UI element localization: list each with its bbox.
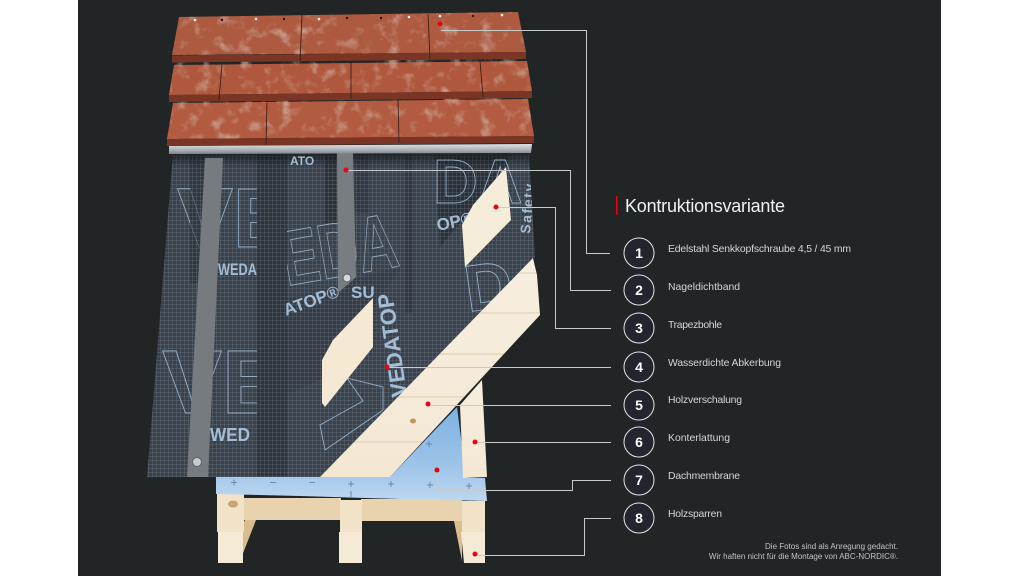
trapezoid plank patch lower [322, 298, 373, 407]
blue roof membrane (Dachmembrane) [216, 407, 487, 501]
item 7: Dachmembrane [668, 471, 740, 482]
tile faces [172, 12, 526, 55]
waterproof underlay (Wasserdichte Abkerbung) [140, 148, 540, 480]
item 8 [624, 503, 722, 533]
large outlined lettering: EDA [275, 196, 404, 303]
item 2 [624, 275, 740, 305]
item 6 [624, 427, 730, 457]
printed VEDATOP lettering: ATOP® [281, 282, 342, 320]
printed VEDATOP lettering: WEDA [218, 260, 257, 279]
printed VEDATOP lettering: SU [351, 283, 375, 302]
footnote: Die Fotos sind als Anregung gedacht. [765, 542, 898, 551]
timber rafters (Holzsparren) [217, 494, 485, 563]
item 8: Holzsparren [668, 509, 722, 520]
waterproof underlay (Wasserdichte Abkerbung): DA [433, 148, 523, 217]
item 7: 7 [635, 472, 643, 488]
item 4: Wasserdichte Abkerbung [668, 358, 781, 369]
leader lines [346, 30, 611, 556]
item 3 [624, 313, 722, 343]
red marker dots [344, 22, 498, 556]
item 1: Edelstahl Senkkopfschraube 4,5 / 45 mm [668, 244, 851, 255]
printed VEDATOP lettering: Safety [517, 183, 537, 234]
item 5: 5 [635, 397, 643, 413]
item 6: Konterlattung [668, 433, 730, 444]
printed VEDATOP lettering: WED [210, 425, 250, 445]
footnote: Wir haften nicht für die Montage von ABC-NORDIC®. [709, 552, 898, 561]
large outlined lettering: VE [177, 171, 289, 265]
item 2: Nageldichtband [668, 282, 740, 293]
item 5: Holzverschalung [668, 395, 742, 406]
roof build-up illustration [140, 8, 545, 563]
item 3: 3 [635, 320, 643, 336]
metal eaves flashing [169, 144, 532, 154]
printed VEDATOP lettering [210, 154, 537, 445]
item 4: 4 [635, 359, 643, 375]
printed VEDATOP lettering: OP® [435, 209, 476, 235]
trapezoid plank patch upper (Trapezbohle) [462, 167, 511, 267]
tile holes [194, 14, 503, 21]
heading: Kontruktionsvariante [625, 196, 785, 216]
item 4 [624, 352, 781, 382]
item 1 [624, 238, 851, 268]
numbered legend [624, 238, 851, 533]
item 2: 2 [635, 282, 643, 298]
item 6: 6 [635, 434, 643, 450]
footnote [709, 542, 898, 561]
item 3: Trapezbohle [668, 320, 722, 331]
printed VEDATOP lettering: ATO [290, 154, 314, 168]
item 1: 1 [635, 245, 643, 261]
roof tiles [160, 8, 540, 145]
membrane overlap seams [190, 153, 510, 477]
large outlined lettering: VE [162, 333, 282, 433]
large outlined lettering [162, 171, 404, 450]
item 5 [624, 390, 742, 420]
printed VEDATOP lettering: VEDATOP [373, 292, 412, 399]
tile lips [167, 56, 534, 142]
item 7 [624, 465, 740, 495]
counter batten (Konterlattung) [460, 380, 487, 478]
galvanised fastening strip centre (Nageldichtband) [337, 153, 356, 293]
wood boarding (Holzverschalung) [320, 258, 540, 477]
item 8: 8 [635, 510, 643, 526]
waterproof underlay (Wasserdichte Abkerbung): D [460, 246, 517, 326]
galvanised fastening strip left [187, 158, 223, 477]
tile joints [219, 14, 483, 145]
